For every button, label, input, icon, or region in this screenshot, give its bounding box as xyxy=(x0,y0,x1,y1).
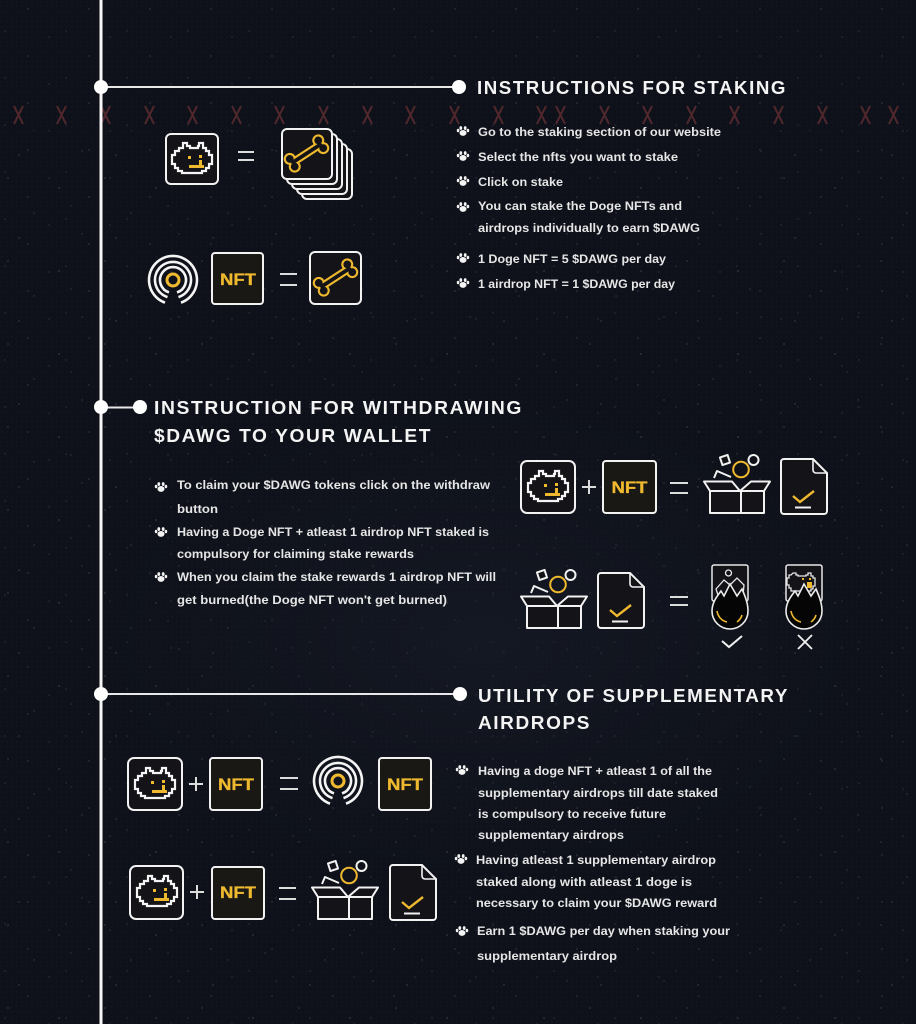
icon: cross mark xyxy=(798,635,812,649)
icon: stack of bone cards xyxy=(281,129,352,199)
utility list: staked along with atleast 1 doge is xyxy=(476,875,692,889)
icon: airdrop target xyxy=(149,256,197,303)
heading: instruction for withdrawing: INSTRUCTION FOR WITHDRAWING xyxy=(154,398,523,418)
staking instructions list: Select the nfts you want to stake xyxy=(478,150,678,164)
staking instructions list: Go to the staking section of our website xyxy=(478,125,721,139)
icon: burned airdrop card xyxy=(712,565,748,629)
withdrawing instructions list: button xyxy=(177,502,218,516)
heading: utility of supplementary airdrops: AIRDROPS xyxy=(478,713,591,733)
panel: utility of supplementary airdrops xyxy=(128,686,789,963)
icon: NFT card: NFT xyxy=(220,884,256,902)
withdrawing instructions list xyxy=(155,478,496,607)
icon: document with check xyxy=(390,865,436,920)
icon: open box xyxy=(521,570,587,628)
utility list: supplementary airdrop xyxy=(477,949,617,963)
icon: burned doge card xyxy=(786,565,822,629)
withdrawing instructions list: To claim your $DAWG tokens click on the withdraw xyxy=(177,478,491,492)
panel: withdrawing $DAWG xyxy=(154,398,827,649)
staking instructions list xyxy=(457,125,721,291)
icon: plus xyxy=(189,777,203,791)
icon: doge card xyxy=(128,758,182,810)
icon: check mark xyxy=(722,636,742,647)
decorative row of red X marks xyxy=(14,106,898,124)
icon: NFT card xyxy=(210,758,262,810)
utility list: Having a doge NFT + atleast 1 of all the xyxy=(478,764,712,778)
utility list xyxy=(455,764,730,963)
staking instructions list: airdrops individually to earn $DAWG xyxy=(478,221,700,235)
staking instructions list: 1 airdrop NFT = 1 $DAWG per day xyxy=(478,277,675,291)
icon: NFT card xyxy=(379,758,431,810)
utility list: is compulsory to receive future xyxy=(478,807,666,821)
icon: NFT card: NFT xyxy=(220,271,256,289)
icon: document with check xyxy=(781,459,827,514)
icon: airdrop target xyxy=(314,757,362,804)
panel: instructions for staking xyxy=(149,78,787,304)
staking instructions list: 1 Doge NFT = 5 $DAWG per day xyxy=(478,252,666,266)
icon: equals xyxy=(238,152,254,160)
icon: doge card xyxy=(166,134,218,184)
heading: instruction for withdrawing: $DAWG TO YOUR WALLET xyxy=(154,426,432,446)
icon: equals xyxy=(280,778,298,789)
withdrawing instructions list: get burned(the Doge NFT won't get burned) xyxy=(177,593,447,607)
utility list: supplementary airdrops till date staked xyxy=(478,786,718,800)
icon: NFT card: NFT xyxy=(218,776,254,794)
icon: doge card xyxy=(521,461,575,513)
icon: NFT card xyxy=(212,253,263,304)
utility list: necessary to claim your $DAWG reward xyxy=(476,896,717,910)
icon: doge card xyxy=(130,866,183,919)
icon: NFT card: NFT xyxy=(387,776,423,794)
withdrawing instructions list: Having a Doge NFT + atleast 1 airdrop NFT staked is xyxy=(177,525,489,539)
icon: open box xyxy=(704,455,770,513)
icon: open box xyxy=(312,861,378,919)
icon: equals xyxy=(280,274,297,285)
withdrawing instructions list: When you claim the stake rewards 1 airdrop NFT will xyxy=(177,570,496,584)
heading: utility of supplementary airdrops: UTILITY OF SUPPLEMENTARY xyxy=(478,686,789,706)
staking instructions list: Click on stake xyxy=(478,175,563,189)
utility list: Having atleast 1 supplementary airdrop xyxy=(476,853,716,867)
withdrawing instructions list: compulsory for claiming stake rewards xyxy=(177,547,414,561)
timeline xyxy=(94,0,467,1024)
icon: NFT card xyxy=(603,461,656,513)
icon: plus xyxy=(190,885,204,899)
icon: equals xyxy=(670,483,688,493)
icon: NFT card xyxy=(212,867,264,919)
icon: bone card xyxy=(310,252,361,304)
icon: document with check xyxy=(598,573,644,628)
staking instructions list: You can stake the Doge NFTs and xyxy=(478,199,682,213)
heading: instruction for withdrawing xyxy=(154,398,523,446)
icon: equals xyxy=(279,888,296,899)
utility list: supplementary airdrops xyxy=(478,828,624,842)
icon: plus xyxy=(582,480,596,494)
icon: NFT card: NFT xyxy=(612,479,648,497)
icon: equals xyxy=(670,597,688,605)
utility list: Earn 1 $DAWG per day when staking your xyxy=(477,924,730,938)
heading: instructions for staking: INSTRUCTIONS FOR STAKING xyxy=(477,78,787,98)
heading: utility of supplementary airdrops xyxy=(478,686,789,733)
